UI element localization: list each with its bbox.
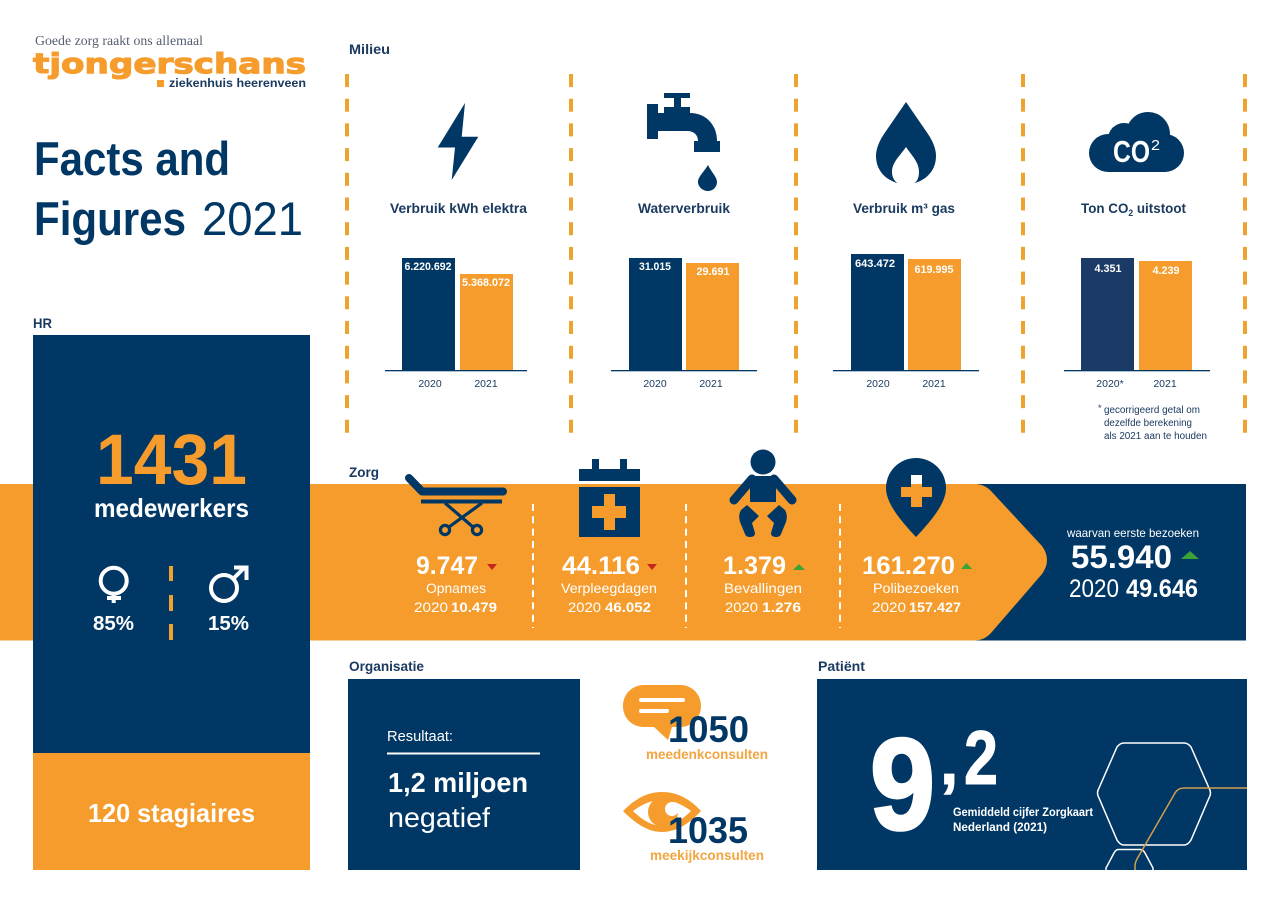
stat: Polibezoeken: 161.270 <box>862 552 955 580</box>
icon: CO2 cloud <box>1089 112 1184 172</box>
stat: Bevallingen: 1.379 <box>723 552 786 580</box>
bar chart: elektra: 2021 <box>474 378 498 390</box>
female percentage: 85% <box>93 613 134 635</box>
stat: eerste bezoeken: waarvan eerste bezoeken <box>1066 526 1199 540</box>
bar chart: CO2: 2021 <box>1153 378 1177 390</box>
stat: Opnames: Opnames <box>426 580 486 596</box>
icon: male <box>211 567 246 601</box>
headcount label: medewerkers <box>94 493 249 523</box>
icon: speech bubble <box>623 685 701 740</box>
bar chart: gas <box>833 254 979 390</box>
stat: Bevallingen: 1.276 <box>762 599 801 615</box>
headcount number: 1431 <box>96 421 247 500</box>
stat: meedenkconsulten <box>646 709 768 762</box>
footnote: als 2021 aan te houden <box>1104 431 1207 442</box>
band: Zorg left stub <box>0 484 34 640</box>
bar chart: gas: 2020 <box>866 378 890 390</box>
score caption: Nederland (2021) <box>953 820 1047 834</box>
score caption: Gemiddeld cijfer Zorgkaart <box>953 805 1093 819</box>
panel: Resultaat: negatief <box>388 802 490 833</box>
stat: eerste bezoeken: 49.646 <box>1126 575 1198 603</box>
stat: Verpleegdagen: 44.116 <box>562 552 640 580</box>
icon: calendar with cross <box>579 459 640 537</box>
title: Facts and <box>34 132 230 185</box>
stat: Polibezoeken: 2020 <box>872 599 906 615</box>
stat: Bevallingen <box>723 552 805 615</box>
bar chart: CO2: 4.351 <box>1094 263 1122 275</box>
icon: female <box>101 568 127 603</box>
bar chart: water <box>611 258 757 390</box>
heading: Patiënt: Patiënt <box>818 658 865 674</box>
bar chart: CO2: 2020* <box>1096 378 1124 390</box>
panel: Resultaat <box>348 679 580 870</box>
heading: Milieu: Milieu <box>349 41 390 57</box>
bar chart: water: 2021 <box>699 378 723 390</box>
icon: stretcher <box>409 478 503 535</box>
score <box>870 711 998 857</box>
title <box>34 132 303 245</box>
bar chart: water: 2020 <box>643 378 667 390</box>
stat: eerste bezoeken: 55.940 <box>1071 539 1172 575</box>
stat: Verpleegdagen: 2020 <box>568 599 601 615</box>
stat: Bevallingen: 2020 <box>725 599 758 615</box>
stat: meedenkconsulten: meedenkconsulten <box>646 746 768 762</box>
bar chart: gas: 2021 <box>922 378 946 390</box>
icon: CO2 cloud: CO <box>1113 134 1150 169</box>
icon: lightning <box>438 103 478 180</box>
stat: Bevallingen: Bevallingen <box>724 580 802 596</box>
icon: gas flame <box>876 102 936 184</box>
stat: Polibezoeken: 157.427 <box>909 599 961 615</box>
heading: Waterverbruik: Waterverbruik <box>638 200 730 216</box>
stat: Polibezoeken <box>862 552 972 615</box>
heading: Ton CO2 uitstoot: Ton CO <box>1081 200 1131 216</box>
score: , <box>940 724 958 798</box>
bar chart: elektra: 5.368.072 <box>462 277 510 289</box>
stat: Opnames: 9.747 <box>416 552 478 580</box>
stat: meekijkconsulten <box>650 810 764 863</box>
icon: CO2 cloud: 2 <box>1151 137 1160 154</box>
stat: Verpleegdagen <box>561 552 657 615</box>
stat: meekijkconsulten: 1035 <box>668 810 748 851</box>
panel: stagiaires: 120 stagiaires <box>88 798 255 828</box>
heading: HR: HR <box>33 315 52 331</box>
icon: eye <box>623 792 701 832</box>
logo: tjongerschans <box>33 47 306 80</box>
panel: HR <box>33 335 310 753</box>
title: 2021 <box>202 192 303 245</box>
stat: Opnames: 10.479 <box>451 599 497 615</box>
footnote: gecorrigeerd getal om <box>1104 405 1200 416</box>
title: Figures <box>34 192 186 245</box>
stat: meedenkconsulten: 1050 <box>668 709 749 750</box>
panel: Resultaat: Resultaat: <box>387 729 453 745</box>
icon: location pin with cross <box>886 458 946 537</box>
stat: Opnames <box>414 552 497 615</box>
male percentage: 15% <box>208 613 249 635</box>
stat: Verpleegdagen: Verpleegdagen <box>561 580 657 596</box>
band: navy right panel <box>900 484 1246 640</box>
score: 9 <box>870 711 935 857</box>
bar chart: elektra: 2020 <box>418 378 442 390</box>
bar chart: gas: 619.995 <box>914 264 954 276</box>
footnote <box>1098 403 1207 442</box>
panel: stagiaires <box>33 753 310 870</box>
bar chart: CO2: 4.239 <box>1152 265 1180 277</box>
icon: baby <box>734 450 792 537</box>
bar chart: water: 29.691 <box>696 266 730 278</box>
band: orange arrow <box>309 484 1047 640</box>
score caption <box>953 805 1093 834</box>
heading: Organisatie: Organisatie <box>349 658 424 674</box>
stat: Opnames: 2020 <box>414 599 448 615</box>
icon: water tap <box>647 93 720 191</box>
logo <box>33 34 306 90</box>
stat: meekijkconsulten: meekijkconsulten <box>650 847 764 863</box>
stat: eerste bezoeken: 2020 <box>1069 575 1119 603</box>
heading: Ton CO2 uitstoot: uitstoot <box>1133 200 1186 216</box>
panel: Patiënt <box>817 679 1247 880</box>
logo: ziekenhuis heerenveen <box>169 76 306 90</box>
footnote: dezelfde berekening <box>1104 418 1192 429</box>
footnote: * <box>1098 403 1102 413</box>
heading: Verbruik kWh elektra: Verbruik kWh elektra <box>390 200 527 216</box>
bar chart: CO2 <box>1064 258 1210 390</box>
bar chart: elektra <box>385 258 527 390</box>
score: 2 <box>964 716 998 801</box>
heading: Verbruik m3 gas: Verbruik m³ gas <box>853 200 955 216</box>
stat: Verpleegdagen: 46.052 <box>605 599 651 615</box>
stat: eerste bezoeken <box>1066 526 1199 603</box>
bar chart: gas: 643.472 <box>855 258 895 270</box>
bar chart: elektra: 6.220.692 <box>404 261 452 273</box>
heading: Zorg: Zorg <box>349 464 379 480</box>
heading: Ton CO2 uitstoot: 2 <box>1128 208 1133 218</box>
stat: Polibezoeken: Polibezoeken <box>873 580 959 596</box>
panel: Resultaat: 1,2 miljoen <box>388 767 528 798</box>
logo: Goede zorg raakt ons allemaal <box>35 34 203 49</box>
bar chart: water: 31.015 <box>639 261 671 273</box>
